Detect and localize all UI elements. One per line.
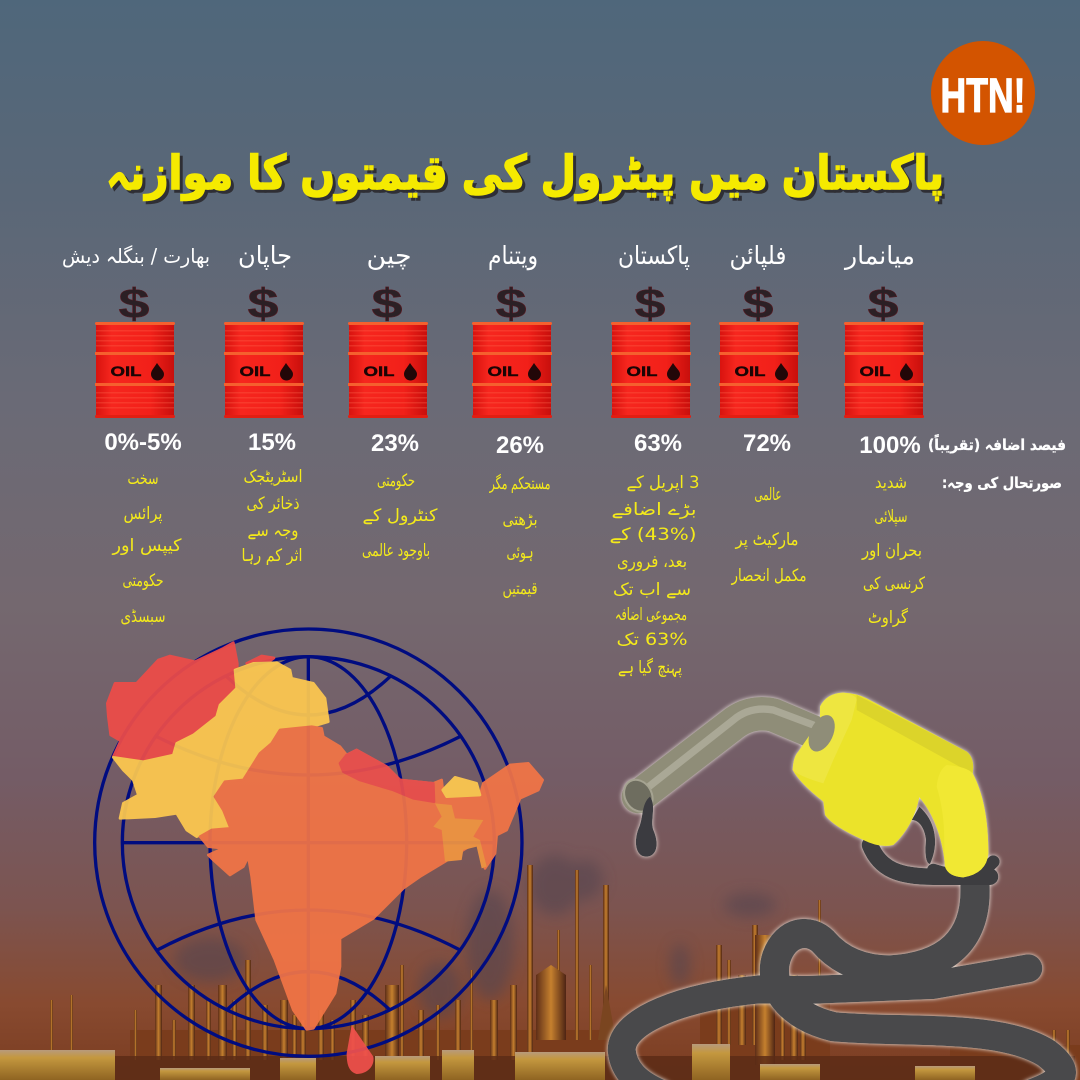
- column: Myanmar: بحران اور: [861, 541, 922, 561]
- row label: reason: صورتحال کی وجہ:: [942, 474, 1062, 492]
- column: Japan: اسٹریٹجک: [244, 467, 302, 487]
- column: Pakistan: پہنچ گیا ہے: [618, 657, 682, 678]
- column: India / Bangladesh: پرائس: [124, 504, 163, 524]
- column: India / Bangladesh: کیپس اور: [111, 536, 182, 556]
- column: Philippines: مکمل انحصار: [731, 566, 806, 586]
- column: Myanmar: OIL: [860, 363, 891, 379]
- row label: percent increase: فیصد اضافہ (تقریباً): [928, 434, 1066, 454]
- column: Myanmar: شدید: [875, 473, 907, 493]
- column: Pakistan: بعد، فروری: [617, 552, 687, 572]
- column: Japan: ذخائر کی: [246, 494, 300, 514]
- column: Vietnam: [472, 241, 552, 599]
- column: India / Bangladesh: 0%-5%: [104, 429, 182, 456]
- India: [200, 727, 543, 1029]
- column: Japan: [224, 241, 304, 566]
- spout: [638, 709, 817, 797]
- column: Myanmar: میانمار: [843, 241, 915, 270]
- column: Myanmar: کرنسی کی: [863, 574, 926, 594]
- oil drop: [636, 797, 657, 857]
- column: Japan: OIL: [240, 363, 271, 379]
- column: India / Bangladesh: سبسڈی: [120, 607, 166, 627]
- trigger: [912, 807, 935, 864]
- column: Pakistan: سے اب تک: [613, 580, 691, 600]
- Bangladesh: [433, 803, 487, 868]
- column: Vietnam: OIL: [488, 363, 519, 379]
- column: Pakistan: 3 اپریل کے: [626, 473, 700, 493]
- column: Vietnam: قیمتیں: [502, 579, 538, 599]
- column: Myanmar: گراوٹ: [868, 607, 909, 628]
- column: Myanmar: [843, 241, 926, 628]
- logo: HTN: HTN!: [940, 70, 1026, 123]
- globe grid: [95, 629, 522, 1056]
- column: Vietnam: مستحکم مگر: [489, 473, 550, 494]
- column: Vietnam: 26%: [496, 432, 544, 459]
- column: India / Bangladesh: OIL: [110, 363, 142, 379]
- column: Pakistan: 63% تک: [616, 630, 688, 650]
- column: Japan: اثر کم رہا: [242, 546, 302, 566]
- hose: [622, 845, 1061, 1080]
- title: پاکستان میں پیٹرول کی قیمتوں کا موازنہ: [106, 146, 944, 201]
- column: Philippines: 72%: [743, 430, 791, 457]
- column: Japan: جاپان: [238, 241, 292, 270]
- column: India / Bangladesh: حکومتی: [122, 571, 164, 591]
- column: China: باوجود عالمی: [362, 541, 430, 561]
- column: Vietnam: ویتنام: [488, 241, 538, 271]
- column: Japan: $: [248, 280, 278, 327]
- column: Myanmar: سپلائی: [874, 507, 908, 527]
- column: India / Bangladesh: $: [118, 280, 150, 327]
- Afghanistan: [107, 643, 274, 762]
- column: Pakistan: مجموعی اضافہ: [615, 605, 687, 625]
- column: Philippines: عالمی: [754, 485, 782, 505]
- column: Pakistan: 63%: [634, 430, 682, 457]
- column: India / Bangladesh: سخت: [128, 469, 158, 489]
- country shapes: [107, 643, 543, 1074]
- yellow body: [793, 693, 988, 877]
- fuel nozzle and hose: [618, 693, 1061, 1080]
- column: Myanmar: 100%: [859, 432, 921, 459]
- Sri Lanka: [347, 1025, 374, 1074]
- column: India / Bangladesh: [62, 244, 210, 627]
- Nepal: [340, 750, 434, 802]
- column: Vietnam: بڑھتی: [502, 510, 538, 530]
- column: Philippines: مارکیٹ پر: [735, 530, 798, 550]
- column: Vietnam: ہوئی: [506, 543, 534, 563]
- column: Japan: 15%: [248, 429, 296, 456]
- column: Pakistan: پاکستان: [618, 241, 690, 270]
- column: China: حکومتی: [377, 471, 415, 491]
- column: China: OIL: [364, 363, 395, 379]
- Pakistan: [113, 663, 328, 837]
- column: Pakistan: $: [634, 280, 666, 327]
- column: Philippines: OIL: [734, 363, 766, 379]
- column: Pakistan: OIL: [626, 363, 658, 379]
- column: China: [348, 241, 438, 561]
- column: Pakistan: [610, 241, 700, 678]
- column: China: $: [372, 280, 402, 327]
- nozzle detail: [793, 693, 988, 877]
- column: Philippines: فلپائن: [730, 241, 786, 270]
- background: refinery skyline: [0, 855, 1080, 1080]
- column: Vietnam: $: [496, 280, 526, 327]
- fuel tower: [536, 965, 566, 1040]
- title: پاکستان میں پیٹرول کی قیمتوں کا موازنہ: [109, 149, 947, 204]
- logo: HTN: [931, 41, 1035, 145]
- column: Pakistan: (43%) کے: [610, 525, 696, 545]
- column: China: کنٹرول کے: [362, 506, 438, 526]
- column: Pakistan: بڑے اضافے: [612, 500, 696, 520]
- column: India / Bangladesh: بھارت / بنگلہ دیش: [62, 244, 210, 268]
- column: Philippines: [719, 241, 806, 586]
- South Asia map on globe: [95, 629, 543, 1074]
- column: Philippines: $: [742, 280, 774, 327]
- column: China: چین: [366, 241, 412, 270]
- column: Myanmar: $: [868, 280, 898, 327]
- Bhutan: [443, 777, 480, 797]
- column: Japan: وجہ سے: [248, 521, 298, 541]
- column: China: 23%: [371, 430, 419, 457]
